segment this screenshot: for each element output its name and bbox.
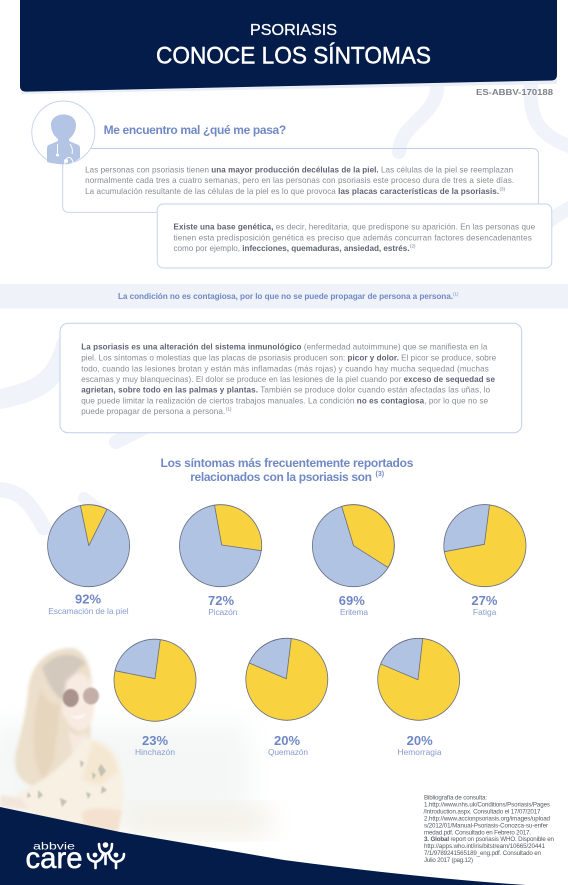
banner: not contagious: La condición no es contagiosa, por lo que no se puede propagar de persona a persona.	[118, 292, 453, 301]
text box: genetic basis: (2)	[410, 244, 416, 248]
heading: most frequent symptoms: Los síntomas más frecuentemente reportados	[160, 456, 414, 470]
pie: 72% picazón	[180, 505, 262, 617]
banner: not contagious	[0, 284, 568, 309]
header banner	[20, 0, 557, 94]
pie: 72% picazón: Picazón	[208, 607, 238, 617]
pie: 72% picazón: 72%	[208, 593, 234, 608]
text box: genetic basis: como por ejemplo, infecciones, quemaduras, ansiedad, estrés.	[174, 244, 410, 253]
text box: genetic basis: Existe una base genética, es decir, hereditaria, que predispone su aparición. En las personas que	[174, 223, 536, 232]
title: psoriasis: PSORIASIS	[250, 22, 337, 39]
text box: causes: (3)	[500, 186, 506, 192]
bibliography: Bibliografía de consulta:	[424, 794, 487, 802]
text box: what is psoriasis: piel. Los síntomas o molestias que las placas de psoriasis producen son: picor y dolor. El picor se produce, sobre	[81, 354, 497, 363]
text box: what is psoriasis: puede propagar de persona a persona.	[81, 407, 225, 416]
footer band	[0, 807, 526, 885]
pie: 69% eritema: 69%	[339, 593, 365, 608]
icon: three figures	[88, 842, 124, 868]
heading: me encuentro mal: Me encuentro mal ¿qué me pasa?	[104, 123, 286, 137]
bibliography: 7/1/9789241565189_eng.pdf. Consultado en	[424, 850, 542, 857]
bibliography: 1.http://www.nhs.uk/Conditions/Psoriasis/Pages	[424, 802, 550, 808]
background decorative curves	[0, 80, 568, 528]
logo: abbvie care: abbvie	[33, 840, 75, 852]
text box: genetic basis: tienen esta predisposición genética es preciso que además concurran factores desencadenantes	[174, 233, 532, 242]
document code: ES-ABBV-170188	[476, 87, 553, 97]
bibliography: s/2012/01/Manual-Psoriasis-Conozca-su-enfer	[424, 822, 548, 830]
pie: 23% hinchazón: 23%	[142, 733, 168, 748]
text box: genetic basis	[157, 204, 552, 268]
pie: 27% fatiga: Fatiga	[473, 607, 497, 617]
pie: 27% fatiga	[444, 505, 526, 617]
bibliography: http://apps.who.int/iris/bitstream/10665/20441	[424, 843, 546, 850]
heading: most frequent symptoms	[160, 456, 414, 484]
text box: what is psoriasis: que puede limitar la realización de ciertos trabajos manuales. La condición no es contagiosa, por lo que no se	[81, 396, 489, 405]
pie: 27% fatiga: 27%	[471, 593, 498, 608]
pie: 20% quemazón	[246, 638, 328, 757]
banner: not contagious: (1)	[453, 292, 459, 296]
bibliography: medad.pdf. Consultado en Febrero 2017.	[424, 829, 531, 836]
text box: causes: La acumulación resultante de las células de la piel es lo que provoca las placas características de la psoriasis.	[85, 187, 499, 196]
avatar: doctor icon	[32, 101, 95, 168]
text box: causes	[63, 148, 538, 212]
pie: 20% hemorragia: Hemorragia	[398, 747, 442, 757]
photo: woman at the beach	[0, 648, 270, 834]
text box: what is psoriasis: escamas y muy blanquecinas). El dolor se produce en las lesiones de la piel cuando por exceso de sequedad se	[81, 375, 495, 384]
text box: causes: normalmente cada tres a cuatro semanas, pero en las personas con psoriasis este proceso dura de tres a siete días.	[85, 176, 514, 185]
bibliography: 3. Global report on psoriasis WHO. Disponible en	[424, 836, 555, 843]
pie: 69% eritema: Eritema	[340, 607, 368, 617]
bibliography: Julio 2017 (pag.12)	[424, 857, 473, 864]
text box: what is psoriasis: agrietan, sobre todo en las palmas y plantas. También se produce dolor cuando están afectadas las uñas, lo	[81, 386, 491, 395]
logo: abbvie care	[26, 840, 124, 875]
text box: what is psoriasis	[60, 323, 522, 433]
bibliography: 2.http://www.accionpsoriasis.org/images/upload	[424, 816, 551, 822]
pie: 20% hemorragia: 20%	[407, 733, 433, 748]
pie: 23% hinchazón: Hinchazón	[135, 747, 175, 757]
text box: what is psoriasis: La psoriasis es una alteración del sistema inmunológico (enfermedad autoimmune) que se manifiesta en la	[81, 343, 488, 352]
logo: abbvie care: care	[26, 842, 82, 875]
bibliography: /Introduction.aspx. Consultado el 17/07/2017	[424, 808, 541, 816]
heading: most frequent symptoms: (3)	[376, 471, 384, 478]
title: conoce los síntomas: CONOCE LOS SÍNTOMAS	[156, 42, 431, 70]
pie: 20% quemazón: 20%	[274, 733, 300, 748]
text box: what is psoriasis: (1)	[226, 406, 232, 412]
pie: 20% hemorragia	[378, 638, 460, 757]
text box: what is psoriasis: todo, cuando las lesiones brotan y están más inflamadas (más rojas) y cuando hay mucha sequedad (muchas	[81, 364, 489, 373]
heading: most frequent symptoms: relacionados con la psoriasis son	[190, 470, 372, 484]
pie: 92% escamación	[48, 505, 130, 616]
pie: 20% quemazón: Quemazón	[268, 747, 308, 757]
pie: 69% eritema	[312, 505, 394, 617]
pie: 92% escamación: Escamación de la piel	[48, 606, 129, 616]
text box: causes: Las personas con psoriasis tienen una mayor producción decélulas de la piel. Las células de la piel se reemplazan	[85, 166, 513, 174]
pie: 23% hinchazón	[114, 639, 196, 757]
bibliography	[424, 794, 555, 864]
pie: 92% escamación: 92%	[75, 592, 101, 606]
